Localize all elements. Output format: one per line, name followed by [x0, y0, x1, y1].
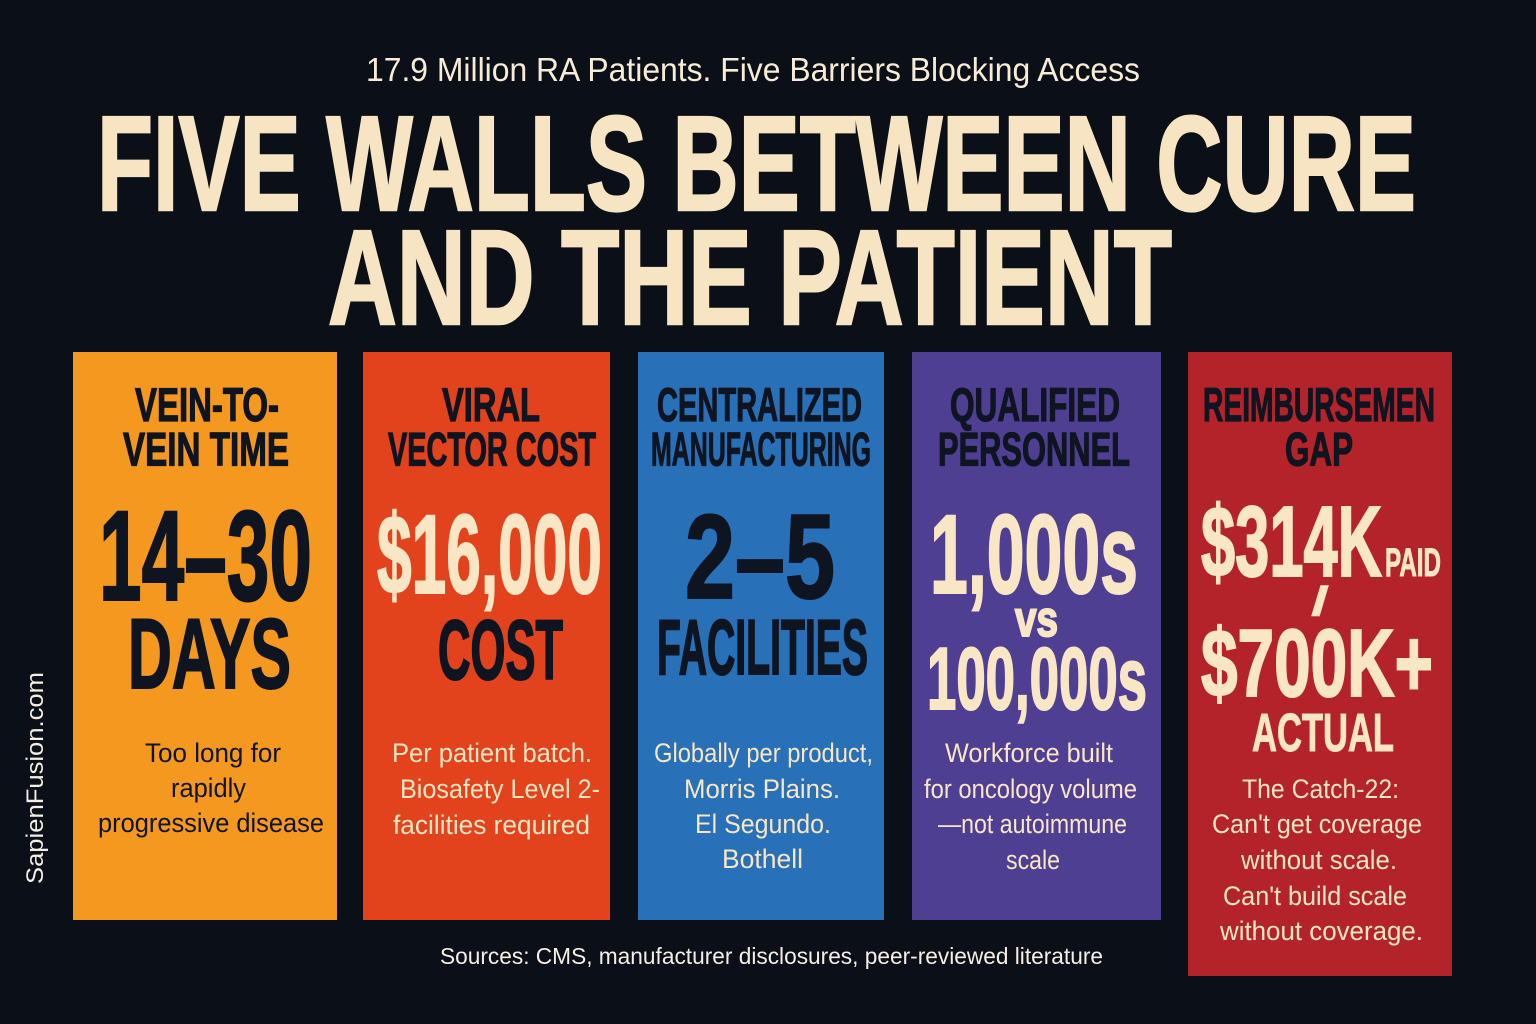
heading: centralized manufacturing: CENTRALIZED [657, 378, 862, 431]
heading: qualified personnel: QUALIFIED [950, 378, 1120, 431]
heading: vein-to-vein time [123, 378, 289, 476]
panel: vein-to-vein time [73, 352, 337, 920]
heading: reimbursement gap: GAP [1285, 422, 1353, 476]
description: Globally per product, [654, 738, 873, 768]
heading: viral vector cost [388, 378, 596, 476]
description: progressive disease [98, 808, 324, 838]
description: without coverage. [1219, 916, 1423, 946]
panel: qualified personnel [912, 352, 1161, 920]
description: —not autoimmune [938, 809, 1127, 839]
description: El Segundo. [695, 809, 831, 839]
stat: 2–5 facilities [657, 490, 868, 691]
description: without scale. [1240, 845, 1397, 875]
heading: reimbursement gap [1203, 378, 1435, 476]
stat: $314K paid / $700K+ actual [1201, 486, 1441, 763]
description [924, 738, 1137, 875]
stat: 14–30 days [99, 485, 312, 709]
heading: centralized manufacturing: MANUFACTURING [651, 422, 871, 476]
heading: qualified personnel [938, 378, 1130, 476]
stat: 1,000s vs 100,000s: 1,000s [930, 492, 1138, 617]
stat: $16,000 cost: COST [438, 603, 563, 697]
description [98, 738, 324, 838]
heading: centralized manufacturing [651, 378, 871, 476]
heading: vein-to-vein time: VEIN-TO- [135, 378, 279, 431]
brand credit: SapienFusion.com [22, 672, 49, 884]
stat: $314K paid / $700K+ actual: PAID [1385, 541, 1441, 585]
description: Bothell [722, 844, 803, 874]
description: Morris Plains. [684, 774, 840, 804]
stat: 1,000s vs 100,000s [927, 492, 1147, 728]
heading: qualified personnel: PERSONNEL [938, 422, 1130, 476]
heading: viral vector cost: VECTOR COST [388, 422, 596, 476]
panel: viral vector cost [363, 352, 610, 920]
subtitle: 17.9 Million RA Patients. Five Barriers Blocking Access [366, 51, 1140, 88]
description: for oncology volume [924, 774, 1137, 804]
stat: $314K paid / $700K+ actual: $314K [1201, 486, 1382, 598]
description: Can't get coverage [1212, 809, 1422, 839]
description: Per patient batch. [392, 738, 592, 768]
stat: 2–5 facilities: 2–5 [685, 490, 835, 624]
stat: $16,000 cost [377, 492, 602, 697]
heading: viral vector cost: VIRAL [442, 378, 540, 431]
title [97, 88, 1416, 353]
stat: 14–30 days: DAYS [128, 598, 291, 709]
description: Workforce built [945, 738, 1113, 768]
stat: $314K paid / $700K+ actual: ACTUAL [1252, 703, 1394, 763]
description: facilities required [393, 810, 590, 840]
sources: Sources: CMS, manufacturer disclosures, peer-reviewed literature [440, 943, 1103, 969]
description [392, 738, 600, 840]
description: Biosafety Level 2- [400, 774, 600, 804]
title: AND THE PATIENT [328, 202, 1172, 353]
stat: 1,000s vs 100,000s: 100,000s [927, 629, 1147, 728]
panel: reimbursement gap [1188, 352, 1452, 976]
stat: $314K paid / $700K+ actual: / [1311, 578, 1329, 624]
description: The Catch-22: [1242, 774, 1399, 804]
description: rapidly [171, 773, 246, 803]
description: scale [1006, 845, 1060, 875]
description [1212, 774, 1423, 946]
stat: 1,000s vs 100,000s: vs [1015, 591, 1058, 647]
stat: $314K paid / $700K+ actual: $700K+ [1201, 610, 1433, 717]
stat: 2–5 facilities: FACILITIES [657, 603, 868, 691]
panel: centralized manufacturing [638, 352, 884, 920]
heading: vein-to-vein time: VEIN TIME [123, 422, 289, 476]
stat: $16,000 cost: $16,000 [377, 492, 602, 617]
stat: 14–30 days: 14–30 [99, 485, 312, 628]
description: Too long for [145, 738, 281, 768]
description [654, 738, 873, 874]
description: Can't build scale [1223, 881, 1407, 911]
